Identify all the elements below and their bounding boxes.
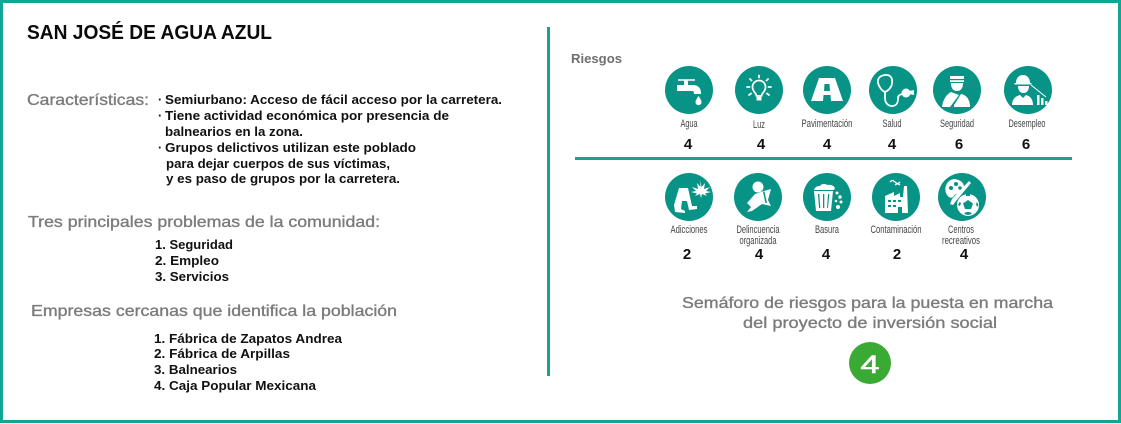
icon: officer xyxy=(933,66,981,114)
value: 4 xyxy=(822,246,831,263)
value: 2 xyxy=(683,246,691,263)
icon: light bulb xyxy=(735,66,783,114)
icon: figure and leaf xyxy=(665,173,713,221)
value: 4 xyxy=(684,136,693,153)
heading: riesgos: Riesgos xyxy=(571,52,622,66)
text block: características list: y es paso de grupos por la carretera. xyxy=(166,172,400,186)
risk: pavimentación xyxy=(802,66,852,153)
text block: características list: · xyxy=(158,93,162,107)
panel: características xyxy=(27,92,502,186)
label line 2: organizada xyxy=(740,235,777,247)
label: Basura xyxy=(815,224,840,236)
text block: características list: Tiene actividad económica por presencia de xyxy=(165,109,449,123)
heading: características: Características: xyxy=(27,92,149,109)
icon: stethoscope xyxy=(869,66,917,114)
list: empresas: 4. Caja Popular Mexicana xyxy=(154,379,317,393)
risk: salud xyxy=(869,66,917,153)
label: Adicciones xyxy=(670,224,708,236)
value: 4 xyxy=(755,246,764,263)
list: empresas xyxy=(154,332,343,393)
traffic light score badge: 4 xyxy=(860,351,880,379)
text block: características list: para dejar cuerpos de sus víctimas, xyxy=(166,157,390,171)
panel: semáforo de riesgos xyxy=(682,295,1053,384)
icon: road xyxy=(803,66,851,114)
title: SAN JOSÉ DE AGUA AZUL xyxy=(27,21,272,44)
label: Delincuencia xyxy=(736,224,780,236)
risk: desempleo xyxy=(1004,66,1052,153)
value: 2 xyxy=(893,246,901,263)
value: 4 xyxy=(888,136,897,153)
risk: adicciones xyxy=(665,173,713,263)
risk: luz xyxy=(735,66,783,153)
label: Pavimentación xyxy=(802,118,852,130)
panel: tres principales problemas xyxy=(28,214,380,284)
list: problemas: 3. Servicios xyxy=(155,270,229,284)
heading: problemas: Tres principales problemas de la comunidad: xyxy=(28,214,380,231)
heading: semáforo line 2: del proyecto de inversión social xyxy=(743,315,997,332)
heading: semáforo line 1: Semáforo de riesgos para la puesta en marcha xyxy=(682,295,1053,312)
icon: water tap xyxy=(665,66,713,114)
text block: características list: Grupos delictivos utilizan este poblado xyxy=(165,141,416,155)
text block: características list: Semiurbano: Acceso de fácil acceso por la carretera. xyxy=(165,93,502,107)
risk: delincuencia organizada xyxy=(734,173,782,263)
value: 4 xyxy=(960,246,969,263)
list: empresas: 1. Fábrica de Zapatos Andrea xyxy=(154,332,343,346)
label: Contaminación xyxy=(870,224,922,236)
icon: factory xyxy=(872,173,920,221)
risk: agua xyxy=(665,66,713,153)
label: Seguridad xyxy=(940,118,974,130)
panel: empresas cercanas xyxy=(31,303,397,393)
risk: centros recreativos xyxy=(938,173,986,263)
text block: características list: balnearios en la zona. xyxy=(165,125,303,139)
text block: características list: · xyxy=(158,141,162,155)
text block: características list: · xyxy=(158,109,162,123)
icon: worker and falling bars xyxy=(1004,66,1052,114)
value: 4 xyxy=(757,136,766,153)
risk: seguridad xyxy=(933,66,981,153)
label: Centros xyxy=(948,224,974,236)
label: Luz xyxy=(753,119,765,131)
icon: palette and ball xyxy=(938,173,986,221)
label: Agua xyxy=(680,118,698,130)
list: problemas xyxy=(155,238,233,284)
icon: crouching figure xyxy=(734,173,782,221)
traffic light score badge xyxy=(849,342,891,384)
label: Salud xyxy=(882,118,902,130)
label line 2: recreativos xyxy=(942,235,980,247)
icon: trash bin xyxy=(803,173,851,221)
label: Desempleo xyxy=(1008,118,1046,130)
value: 6 xyxy=(1022,136,1030,153)
list: problemas: 2. Empleo xyxy=(155,254,219,268)
list: empresas: 2. Fábrica de Arpillas xyxy=(154,347,290,361)
risk: contaminación xyxy=(870,173,922,263)
value: 4 xyxy=(823,136,832,153)
text block: características list xyxy=(158,93,502,186)
heading: empresas: Empresas cercanas que identifica la población xyxy=(31,303,397,320)
value: 6 xyxy=(955,136,963,153)
risk: basura xyxy=(803,173,851,263)
list: problemas: 1. Seguridad xyxy=(155,238,233,252)
list: empresas: 3. Balnearios xyxy=(154,363,237,377)
